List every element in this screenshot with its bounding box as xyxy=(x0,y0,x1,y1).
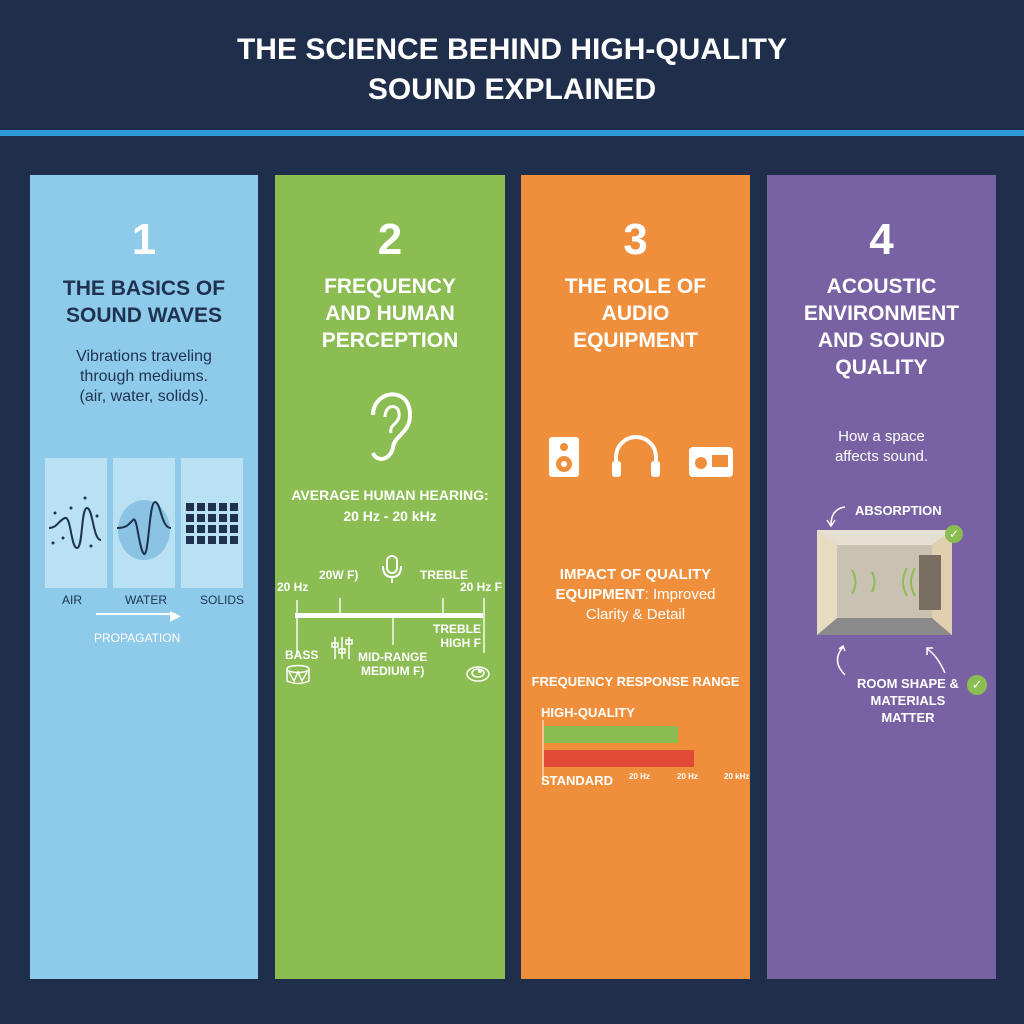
heading: AND HUMAN xyxy=(325,302,455,325)
arrows to room xyxy=(836,645,946,676)
heading xyxy=(63,277,225,327)
heading: ACOUSTIC xyxy=(827,275,936,298)
labels xyxy=(62,593,244,645)
heading xyxy=(804,275,959,379)
hearing range: AVERAGE HUMAN HEARING: xyxy=(291,487,489,503)
number 2: 2 xyxy=(378,215,402,264)
heading: ENVIRONMENT xyxy=(804,302,959,325)
callout: absorption xyxy=(826,503,942,528)
room diagram xyxy=(817,530,952,635)
frequency scale: 20 Hz F xyxy=(460,580,502,594)
frequency scale: 20 Hz xyxy=(277,580,308,594)
labels: WATER xyxy=(125,593,167,607)
heading: AUDIO xyxy=(602,302,669,325)
heading: QUALITY xyxy=(835,356,928,379)
text xyxy=(76,348,212,405)
frequency scale: MID-RANGE xyxy=(358,650,427,664)
frequency scale: MEDIUM F) xyxy=(361,664,424,678)
number 4: 4 xyxy=(869,215,894,264)
frequency scale: TREBLE xyxy=(420,568,468,582)
icon: equalizer xyxy=(331,637,353,659)
bar chart: STANDARD xyxy=(541,773,613,788)
heading: FREQUENCY xyxy=(324,275,456,298)
panel: acoustics: ROOM SHAPE & xyxy=(857,676,959,691)
callout: absorption: ABSORPTION xyxy=(855,503,942,518)
bar chart: FREQUENCY RESPONSE RANGE xyxy=(532,674,739,689)
labels: AIR xyxy=(62,593,82,607)
hearing range: 20 Hz - 20 kHz xyxy=(343,508,437,524)
bar chart xyxy=(532,674,750,788)
impact text xyxy=(555,566,716,623)
heading xyxy=(565,275,706,352)
heading: EQUIPMENT xyxy=(573,329,698,352)
text: through mediums. xyxy=(80,368,208,385)
heading: AND SOUND xyxy=(818,329,945,352)
title xyxy=(237,33,787,106)
heading: SOUND WAVES xyxy=(66,304,222,327)
labels: ▶ xyxy=(170,607,181,623)
panel: acoustics: MATTER xyxy=(881,710,935,725)
frequency scale: HIGH F xyxy=(440,636,481,650)
heading xyxy=(322,275,458,352)
hearing range xyxy=(291,487,489,524)
number 1: 1 xyxy=(132,215,156,264)
panel: acoustics: ✓ xyxy=(972,677,982,692)
heading: THE BASICS OF xyxy=(63,277,225,300)
impact text: Clarity & Detail xyxy=(586,606,685,623)
frequency scale: 20W F) xyxy=(319,568,358,582)
bar chart: 20 Hz xyxy=(629,772,650,781)
frequency scale: TREBLE xyxy=(433,622,481,636)
labels: PROPAGATION xyxy=(94,631,180,645)
title: SOUND EXPLAINED xyxy=(368,73,656,106)
panel: acoustics: MATERIALS xyxy=(870,693,945,708)
icon: drum xyxy=(286,664,310,684)
icons: speaker headphones radio xyxy=(549,435,733,477)
panel: acoustics xyxy=(767,175,996,979)
icon: ear xyxy=(371,392,412,461)
impact text: IMPACT OF QUALITY xyxy=(560,566,711,583)
panel: basics xyxy=(30,175,258,979)
title: THE SCIENCE BEHIND HIGH-QUALITY xyxy=(237,33,787,66)
labels: SOLIDS xyxy=(200,593,244,607)
text xyxy=(835,428,928,465)
text: (air, water, solids). xyxy=(80,388,208,405)
number 3: 3 xyxy=(623,215,648,264)
panel: equipment xyxy=(521,175,750,979)
bar chart: 20 Hz xyxy=(677,772,698,781)
text: affects sound. xyxy=(835,448,928,465)
bar chart: 20 kHz xyxy=(724,772,749,781)
heading: PERCEPTION xyxy=(322,329,458,352)
frequency scale: BASS xyxy=(285,648,318,662)
panel: acoustics: ✓ xyxy=(949,527,959,541)
frequency scale xyxy=(277,555,502,684)
panel: frequency xyxy=(275,175,505,979)
bar chart: HIGH-QUALITY xyxy=(541,705,635,720)
icon: swirl xyxy=(466,666,490,682)
wave diagrams xyxy=(45,458,243,588)
text: How a space xyxy=(838,428,925,445)
icon: microphone xyxy=(382,555,402,583)
heading: THE ROLE OF xyxy=(565,275,706,298)
impact text: EQUIPMENT: Improved xyxy=(555,586,716,603)
text: Vibrations traveling xyxy=(76,348,212,365)
